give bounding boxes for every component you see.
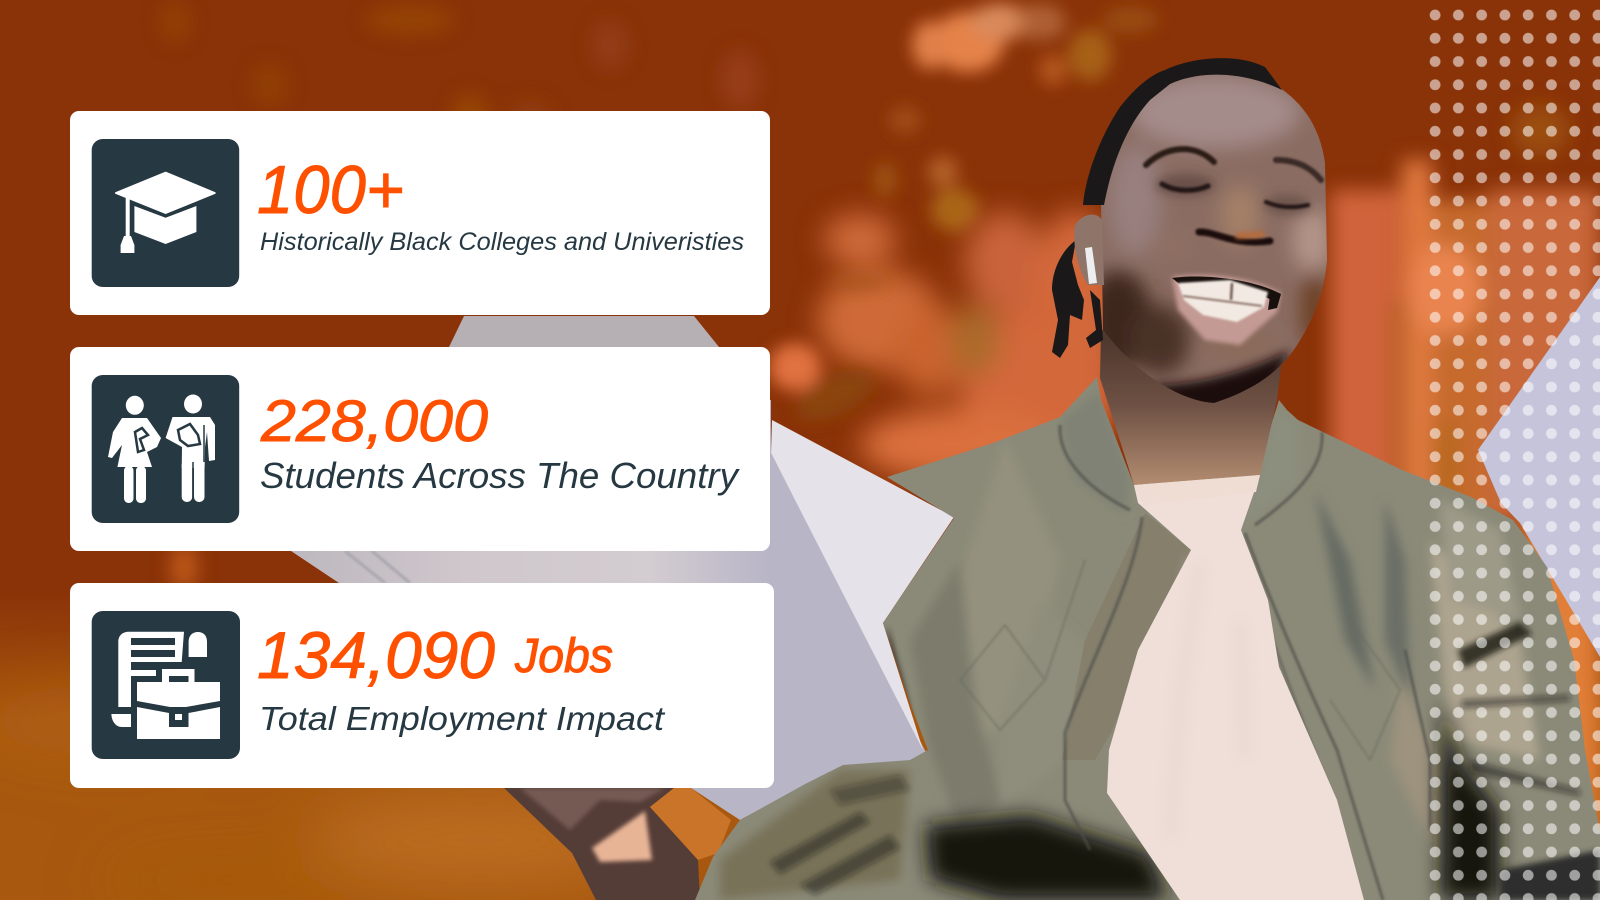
student: hair and dreadlocks <box>1052 58 1282 358</box>
student: neck <box>1100 330 1283 505</box>
icon: document and briefcase <box>92 611 240 759</box>
icon: two students with books <box>92 375 239 523</box>
card: 134,090 jobs <box>70 583 774 788</box>
student: ear and earbud <box>1074 215 1104 285</box>
paper held up by the student <box>291 316 954 820</box>
halftone dot pattern <box>1424 4 1600 900</box>
student: jacket <box>695 377 1600 900</box>
student: t-shirt <box>1107 475 1364 900</box>
lavender background shape <box>1478 277 1600 657</box>
stat unit: Jobs <box>514 630 613 683</box>
card: 228,000 students <box>70 347 770 551</box>
stat caption: Total Employment Impact <box>259 700 666 737</box>
lapel flap <box>1062 513 1191 760</box>
stat number: 228,000 <box>260 389 488 454</box>
stat caption: Historically Black Colleges and Univeristies <box>260 228 744 256</box>
student: face <box>1101 74 1327 403</box>
student: hand <box>504 788 731 900</box>
student: smile <box>1172 275 1281 345</box>
icon: graduation cap <box>92 139 239 287</box>
card: 100+ colleges <box>70 111 770 315</box>
stat number: 134,090 <box>257 618 495 692</box>
stat number: 100+ <box>257 152 404 228</box>
stat caption: Students Across The Country <box>260 455 740 496</box>
